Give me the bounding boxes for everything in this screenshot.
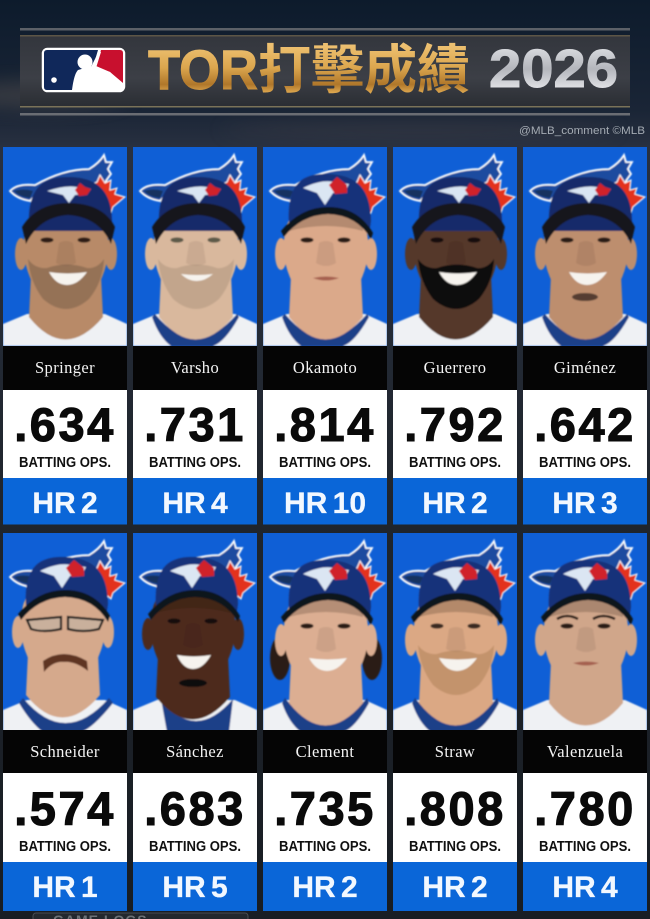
name xyxy=(393,346,517,390)
home runs: HR 4 xyxy=(162,487,228,520)
OPS panel: BATTING OPS. xyxy=(409,455,501,471)
card: Sánchez xyxy=(133,533,257,911)
OPS panel: BATTING OPS. xyxy=(19,839,111,855)
name xyxy=(263,346,387,390)
name: Varsho xyxy=(171,358,219,377)
home runs: HR 4 xyxy=(552,871,618,904)
name xyxy=(393,730,517,773)
OPS panel xyxy=(133,390,257,478)
OPS panel: .683 xyxy=(144,782,246,835)
name: Guerrero xyxy=(424,358,486,377)
name xyxy=(263,730,387,773)
credit: @MLB_comment ©MLB xyxy=(519,125,645,137)
card: Schneider xyxy=(3,533,127,911)
OPS panel: BATTING OPS. xyxy=(279,455,371,471)
photo xyxy=(133,147,257,346)
OPS panel: BATTING OPS. xyxy=(19,455,111,471)
name xyxy=(3,730,127,773)
OPS panel: .731 xyxy=(144,398,246,451)
card: Okamoto xyxy=(263,147,387,524)
title banner xyxy=(20,28,630,116)
home runs: HR 10 xyxy=(284,487,366,520)
photo xyxy=(133,533,257,732)
card: Valenzuela xyxy=(523,533,647,911)
icon: MLB logo xyxy=(42,48,124,92)
OPS panel xyxy=(523,773,647,862)
card: Clement xyxy=(263,533,387,911)
home runs xyxy=(3,478,127,524)
home runs xyxy=(263,862,387,911)
OPS panel: BATTING OPS. xyxy=(149,839,241,855)
home runs: HR 2 xyxy=(422,871,488,904)
name xyxy=(133,346,257,390)
clipped footer panel xyxy=(33,912,248,919)
home runs xyxy=(523,478,647,524)
OPS panel: BATTING OPS. xyxy=(539,455,631,471)
OPS panel: .808 xyxy=(404,782,506,835)
OPS panel xyxy=(3,773,127,862)
photo xyxy=(523,533,647,732)
photo xyxy=(523,147,647,346)
OPS panel: BATTING OPS. xyxy=(279,839,371,855)
home runs xyxy=(133,862,257,911)
OPS panel xyxy=(393,390,517,478)
OPS panel: .634 xyxy=(14,398,116,451)
OPS panel xyxy=(393,773,517,862)
OPS panel xyxy=(263,390,387,478)
OPS panel: .814 xyxy=(274,398,376,451)
OPS panel: BATTING OPS. xyxy=(409,839,501,855)
name: Schneider xyxy=(30,742,100,761)
photo xyxy=(263,533,387,732)
photo xyxy=(263,147,387,346)
name: Valenzuela xyxy=(547,742,623,761)
card: Straw xyxy=(393,533,517,911)
home runs: HR 1 xyxy=(32,871,98,904)
photo xyxy=(393,533,517,732)
name: Sánchez xyxy=(166,742,224,761)
home runs xyxy=(263,478,387,524)
home runs: HR 3 xyxy=(552,487,618,520)
name: Straw xyxy=(435,742,475,761)
name xyxy=(523,346,647,390)
photo xyxy=(3,533,127,732)
title text: TOR xyxy=(148,38,258,101)
OPS panel xyxy=(263,773,387,862)
name: Okamoto xyxy=(293,358,357,377)
card: Guerrero xyxy=(393,147,517,524)
OPS panel xyxy=(523,390,647,478)
year: 2026 xyxy=(489,39,618,99)
name: Springer xyxy=(35,358,95,377)
photo xyxy=(393,147,517,346)
title text xyxy=(148,38,470,101)
card: Giménez xyxy=(523,147,647,524)
OPS panel: BATTING OPS. xyxy=(149,455,241,471)
home runs: HR 2 xyxy=(422,487,488,520)
home runs: HR 2 xyxy=(32,487,98,520)
home runs xyxy=(393,862,517,911)
name xyxy=(3,346,127,390)
OPS panel: .642 xyxy=(534,398,636,451)
OPS panel: .780 xyxy=(534,782,636,835)
OPS panel: .735 xyxy=(274,782,376,835)
home runs xyxy=(523,862,647,911)
photo xyxy=(3,147,127,346)
home runs: HR 5 xyxy=(162,871,228,904)
OPS panel xyxy=(133,773,257,862)
home runs xyxy=(133,478,257,524)
card: Springer xyxy=(3,147,127,524)
title text: 打擊成績 xyxy=(258,41,470,100)
name: Giménez xyxy=(554,358,616,377)
name xyxy=(133,730,257,773)
card: Varsho xyxy=(133,147,257,524)
OPS panel xyxy=(3,390,127,478)
OPS panel: BATTING OPS. xyxy=(539,839,631,855)
home runs: HR 2 xyxy=(292,871,358,904)
name xyxy=(523,730,647,773)
name: Clement xyxy=(296,742,354,761)
OPS panel: .792 xyxy=(404,398,506,451)
home runs xyxy=(393,478,517,524)
OPS panel: .574 xyxy=(14,782,116,835)
home runs xyxy=(3,862,127,911)
